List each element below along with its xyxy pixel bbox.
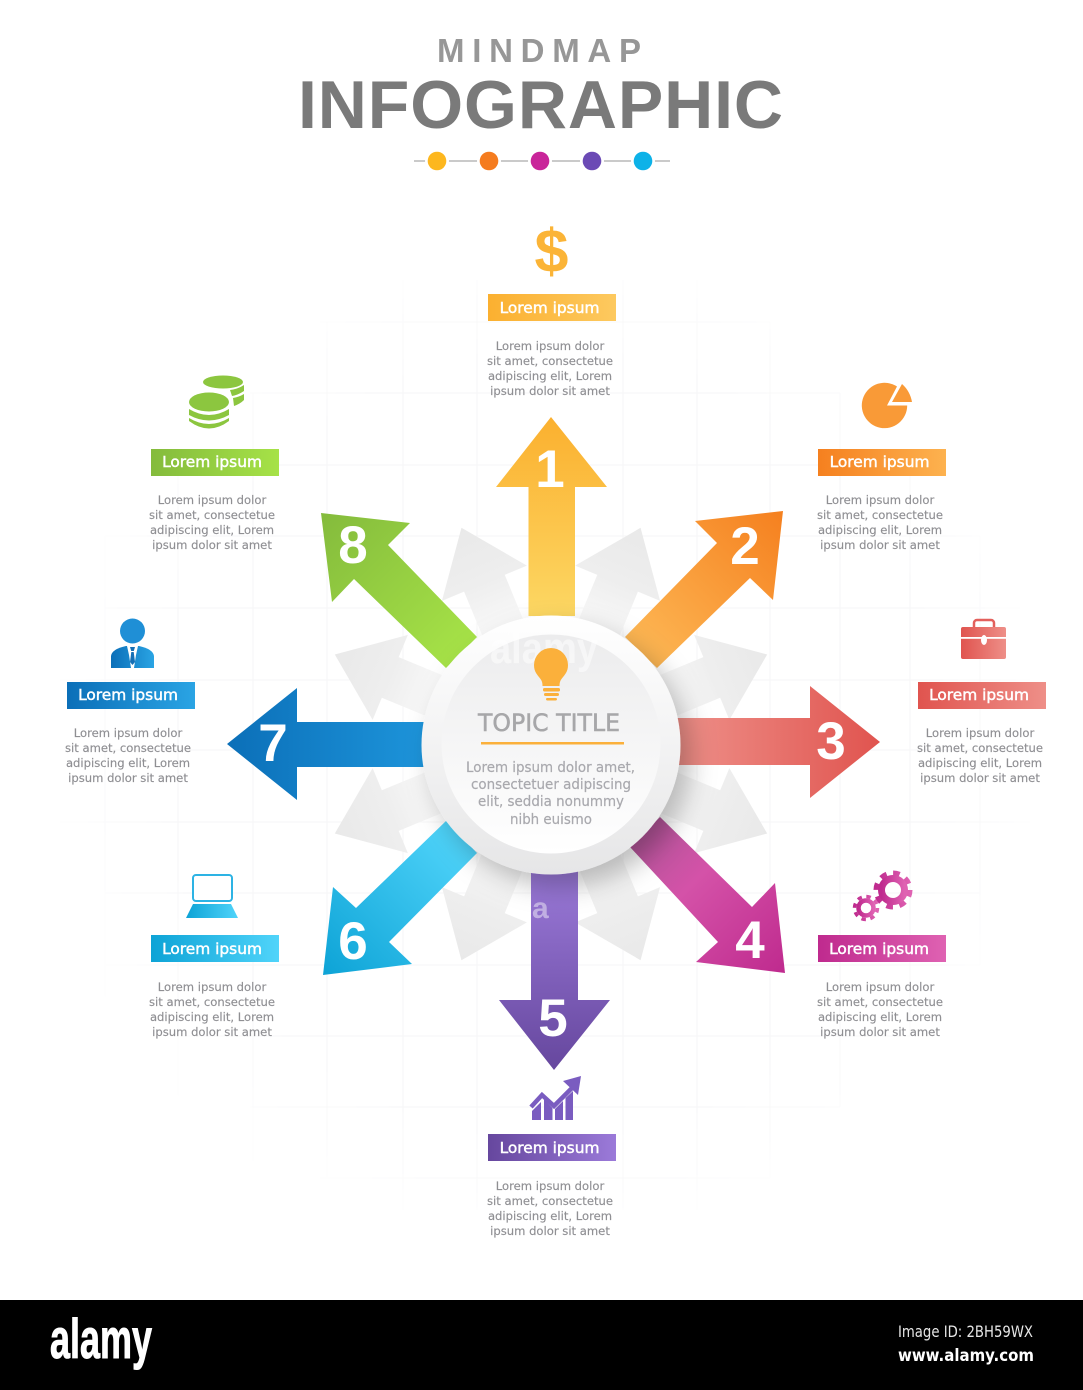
icon: dollar: $ bbox=[535, 217, 569, 285]
arrow 5: 5 bbox=[538, 989, 568, 1048]
text 4: ipsum dolor sit amet bbox=[820, 1025, 940, 1039]
text 1: Lorem ipsum dolor bbox=[496, 339, 604, 353]
title: INFOGRAPHIC: INFOGRAPHIC bbox=[298, 67, 783, 143]
watermark on purple arrow: a bbox=[532, 892, 549, 925]
text 7 bbox=[65, 726, 191, 785]
icon: gears bbox=[854, 873, 910, 920]
title underline bbox=[481, 742, 624, 744]
text 5 bbox=[487, 1179, 613, 1238]
label 5: Lorem ipsum bbox=[500, 1139, 599, 1157]
icon: light bulb bbox=[534, 648, 568, 700]
panel 8 bbox=[149, 376, 279, 552]
icon: coins bbox=[189, 376, 244, 428]
arrow 3: 3 bbox=[816, 712, 846, 771]
label 1 bbox=[488, 294, 616, 321]
text 6: ipsum dolor sit amet bbox=[152, 1025, 272, 1039]
website: www.alamy.com bbox=[898, 1346, 1034, 1366]
arrow 8 bbox=[321, 513, 477, 668]
text 3: ipsum dolor sit amet bbox=[920, 771, 1040, 785]
text 2: Lorem ipsum dolor bbox=[826, 493, 934, 507]
label 1: Lorem ipsum bbox=[500, 299, 599, 317]
arrow 6 bbox=[323, 821, 477, 975]
label 6: Lorem ipsum bbox=[162, 940, 262, 958]
label 3: Lorem ipsum bbox=[929, 686, 1029, 704]
image id: Image ID: 2BH59WX bbox=[898, 1322, 1033, 1341]
panel 5 bbox=[487, 1076, 616, 1238]
text 3: sit amet, consectetue bbox=[917, 741, 1043, 755]
subtitle: MINDMAP: MINDMAP bbox=[437, 32, 641, 69]
footer logo: alamy bbox=[50, 1307, 152, 1370]
text 8: sit amet, consectetue bbox=[149, 508, 275, 522]
text 1: sit amet, consectetue bbox=[487, 354, 613, 368]
arrow 1: 1 bbox=[535, 440, 565, 499]
icon: growth chart bbox=[531, 1076, 581, 1120]
text 2: adipiscing elit, Lorem bbox=[818, 523, 942, 537]
label 2 bbox=[818, 449, 946, 476]
text 2: ipsum dolor sit amet bbox=[820, 538, 940, 552]
hub description: elit, seddia nonummy bbox=[478, 794, 624, 810]
icon: pie chart bbox=[862, 383, 912, 428]
arrow 1 bbox=[496, 417, 607, 616]
arrow 8: 8 bbox=[338, 516, 368, 575]
hub description bbox=[466, 760, 635, 828]
label 7: Lorem ipsum bbox=[78, 686, 178, 704]
text 4: adipiscing elit, Lorem bbox=[818, 1010, 942, 1024]
text 1: ipsum dolor sit amet bbox=[490, 384, 610, 398]
text 4: sit amet, consectetue bbox=[817, 995, 943, 1009]
arrow 7: 7 bbox=[258, 714, 288, 773]
label 3 bbox=[918, 682, 1046, 709]
label 6 bbox=[151, 935, 279, 962]
arrow 2 bbox=[625, 511, 783, 668]
text 7: ipsum dolor sit amet bbox=[68, 771, 188, 785]
text 4: Lorem ipsum dolor bbox=[826, 980, 934, 994]
panel 3 bbox=[917, 620, 1046, 785]
panel 7 bbox=[65, 618, 195, 785]
text 5: ipsum dolor sit amet bbox=[490, 1224, 610, 1238]
hub description: nibh euismo bbox=[510, 812, 592, 828]
decorative dot row bbox=[414, 149, 670, 173]
arrow 3 bbox=[670, 686, 880, 798]
text 6: Lorem ipsum dolor bbox=[158, 980, 266, 994]
arrow 2: 2 bbox=[730, 517, 760, 576]
icon: person bbox=[111, 618, 154, 668]
text 1 bbox=[487, 339, 613, 398]
text 5: Lorem ipsum dolor bbox=[496, 1179, 604, 1193]
text 6: sit amet, consectetue bbox=[149, 995, 275, 1009]
panel 4 bbox=[817, 873, 946, 1039]
text 8 bbox=[149, 493, 275, 552]
label 7 bbox=[67, 682, 195, 709]
text 3: Lorem ipsum dolor bbox=[926, 726, 1034, 740]
text 3: adipiscing elit, Lorem bbox=[918, 756, 1042, 770]
text 5: adipiscing elit, Lorem bbox=[488, 1209, 612, 1223]
icon: briefcase bbox=[961, 620, 1006, 659]
text 2 bbox=[817, 493, 943, 552]
hub description: consectetuer adipiscing bbox=[471, 777, 631, 793]
text 8: adipiscing elit, Lorem bbox=[150, 523, 274, 537]
text 7: sit amet, consectetue bbox=[65, 741, 191, 755]
central hub bbox=[422, 616, 680, 874]
panel 6 bbox=[149, 875, 279, 1039]
panel 2 bbox=[817, 383, 946, 552]
text 8: Lorem ipsum dolor bbox=[158, 493, 266, 507]
label 8 bbox=[151, 449, 279, 476]
topic title: TOPIC TITLE bbox=[477, 709, 620, 737]
panel 1 bbox=[487, 217, 616, 398]
text 3 bbox=[917, 726, 1043, 785]
text 7: adipiscing elit, Lorem bbox=[66, 756, 190, 770]
title block bbox=[298, 32, 783, 143]
icon: laptop bbox=[186, 875, 238, 918]
text 7: Lorem ipsum dolor bbox=[74, 726, 182, 740]
arrow 7 bbox=[227, 688, 430, 800]
label 8: Lorem ipsum bbox=[162, 453, 262, 471]
text 5: sit amet, consectetue bbox=[487, 1194, 613, 1208]
text 6 bbox=[149, 980, 275, 1039]
arrow 5 bbox=[499, 865, 610, 1070]
text 8: ipsum dolor sit amet bbox=[152, 538, 272, 552]
arrow 4: 4 bbox=[735, 911, 765, 970]
hub description: Lorem ipsum dolor amet, bbox=[466, 760, 635, 776]
watermark on hub: alamy bbox=[490, 624, 598, 673]
arrow 6: 6 bbox=[338, 912, 368, 971]
text 6: adipiscing elit, Lorem bbox=[150, 1010, 274, 1024]
footer bar bbox=[0, 1300, 1083, 1390]
label 2: Lorem ipsum bbox=[830, 453, 929, 471]
label 4: Lorem ipsum bbox=[829, 940, 929, 958]
arrow 4 bbox=[630, 817, 785, 973]
text 4 bbox=[817, 980, 943, 1039]
label 4 bbox=[818, 935, 946, 962]
text 1: adipiscing elit, Lorem bbox=[488, 369, 612, 383]
label 5 bbox=[488, 1134, 616, 1161]
ghost arrows behind the hub bbox=[317, 510, 785, 978]
text 2: sit amet, consectetue bbox=[817, 508, 943, 522]
